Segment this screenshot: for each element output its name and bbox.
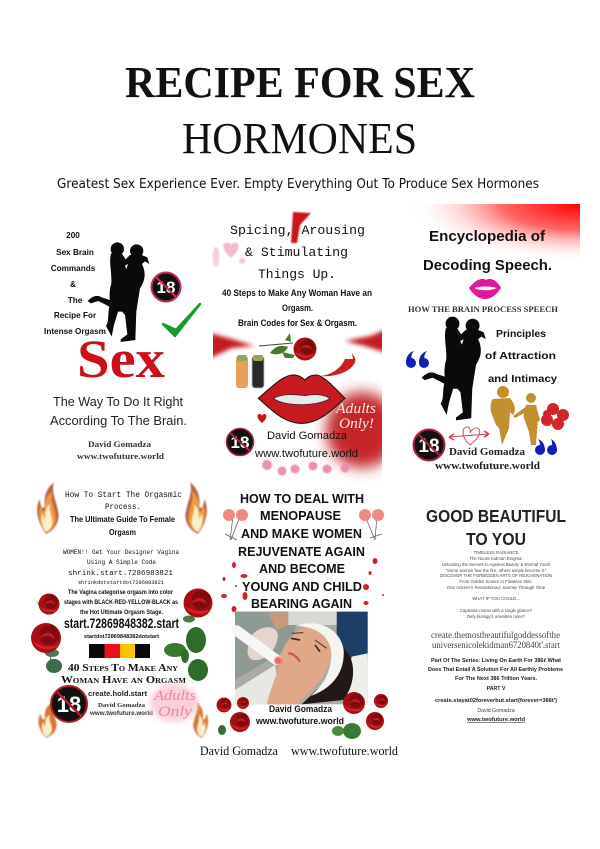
icon: pink lips xyxy=(469,279,501,299)
subheading: how the brain process speech: HOW THE BRAIN PROCESS SPEECH xyxy=(408,305,559,314)
decorative red smears xyxy=(206,328,398,468)
label: adults only: Adults xyxy=(153,688,196,704)
text: principles of attraction: and Intimacy xyxy=(488,373,557,385)
subtitle: the way to do it right xyxy=(50,394,187,428)
icon: pink flowers xyxy=(262,460,350,476)
footer credit xyxy=(200,744,399,758)
icon: 18 plus badge xyxy=(414,430,444,460)
photo: facial treatment xyxy=(235,612,368,704)
author credit xyxy=(88,689,153,717)
heading: how to deal with menopause: AND BECOME xyxy=(259,561,345,576)
author credit: David Gomadza xyxy=(267,430,348,442)
text: timeless radiance intro: The Nicole Kidman Enigma: xyxy=(469,556,523,561)
icon: 18 plus badge: 18 xyxy=(418,436,440,457)
text: colour stages: stages with BLACK-RED-YELLOW-BLACK as xyxy=(64,599,178,606)
subheading: ultimate guide xyxy=(70,514,175,537)
icon: roses right xyxy=(164,588,212,681)
heading: 200 sex brain commands: Intense Orgasm xyxy=(44,327,106,336)
icon: colour flag bar xyxy=(89,644,150,658)
heading: how to deal with menopause: HOW TO DEAL WITH xyxy=(240,491,364,506)
subheading: 40 steps: Brain Codes for Sex & Orgasm. xyxy=(238,318,357,329)
footer credit: www.twofuture.world xyxy=(291,744,399,758)
text: designer code: Using A Simple Code xyxy=(87,559,156,566)
icon: 18 plus badge xyxy=(152,272,180,302)
heading: Sex: Sex xyxy=(77,329,165,389)
heading: spicing arousing: Spicing, Arousing xyxy=(230,223,365,238)
heading: good beautiful to you: TO YOU xyxy=(466,529,526,549)
subheading: 40 steps: Orgasm. xyxy=(282,303,313,314)
text: colour stages: the Hot Ultimate Orgasm Stage. xyxy=(80,609,163,616)
icon: 18 plus badge: 18 xyxy=(157,278,175,297)
heading: good beautiful to you: GOOD BEAUTIFUL xyxy=(426,506,566,526)
heading: how to start: How To Start The Orgasmic xyxy=(65,491,182,500)
panel: book cover Encyclopedia xyxy=(406,204,580,472)
heading: how to deal with menopause: YOUNG AND CHILD xyxy=(242,579,362,594)
text: timeless radiance intro: TIMELESS RADIANCE xyxy=(474,550,518,555)
text: principles of attraction: Principles xyxy=(496,328,546,340)
heading: encyclopedia: Decoding Speech. xyxy=(423,258,552,274)
code: create the most beautiful goddess: universenicolekidman6720840t'.start xyxy=(432,641,560,651)
icon: gold couple xyxy=(491,386,540,445)
icon: roses strip xyxy=(216,692,388,739)
text: part of the series: Part Of The Series: Living On Earth For 386ℓ What xyxy=(431,658,561,664)
decorative red corner gradient xyxy=(408,204,580,262)
icon: 18 plus badge xyxy=(226,428,254,456)
label: adults only: Only! xyxy=(339,416,374,432)
panel: book cover Spicing xyxy=(206,212,398,476)
heading: encyclopedia xyxy=(423,229,552,274)
footer credit: David Gomadza xyxy=(200,744,278,758)
text: timeless radiance intro: One Actress's Revolutionary Journey Through Time xyxy=(447,585,546,590)
code: startdot: startdot72869848382dotstart xyxy=(84,634,159,640)
heading: 200 sex brain commands: Recipe For xyxy=(54,311,97,320)
icon: red flower xyxy=(541,403,569,430)
heading: 200 sex brain commands xyxy=(44,231,106,336)
decorative red petals xyxy=(221,558,384,612)
author credit: www.twofuture.world xyxy=(254,448,358,460)
author credit xyxy=(435,447,540,472)
author credit xyxy=(466,708,525,723)
text: designer code: shrinkdotstartdot7286983821 xyxy=(78,579,165,586)
heading: how to deal with menopause: MENOPAUSE xyxy=(260,508,341,523)
text: timeless radiance intro: DISCOVER THE FORBIDDEN ARTS OF REJUVENATION xyxy=(440,573,552,578)
text: designer code: shrink.start.7286983821 xyxy=(68,570,173,578)
author credit: create.hold.start xyxy=(88,689,148,698)
title: RECIPE FOR SEX xyxy=(125,58,475,107)
title: HORMONES xyxy=(182,114,417,163)
text: part of the series: For The Next 386 Trillion Years. xyxy=(455,676,538,682)
subtitle: the way to do it right: According To The Brain. xyxy=(50,413,187,428)
panel: book cover Sex xyxy=(44,231,200,461)
text: part of the series: Does That Entail A Solution For All Earthly Problems xyxy=(428,667,563,673)
heading: how to deal with menopause: AND MAKE WOMEN xyxy=(241,526,362,541)
icon: bouquet right xyxy=(359,509,384,540)
icon: small heart xyxy=(258,414,266,423)
heading: 200 sex brain commands: Sex Brain xyxy=(56,248,94,257)
panel: book cover Menopause xyxy=(216,491,388,739)
heading: 200 sex brain commands: The xyxy=(68,296,83,305)
heading: how to start: Process. xyxy=(105,503,141,512)
heading: spicing arousing: Things Up. xyxy=(258,267,336,282)
text: principles of attraction xyxy=(485,328,557,385)
author credit xyxy=(254,430,358,460)
label: adults only: Only xyxy=(158,704,192,720)
heading: how to deal with menopause xyxy=(238,491,365,611)
icon: 18 plus badge xyxy=(51,686,87,722)
author credit: www.twofuture.world xyxy=(77,451,164,461)
label: adults only xyxy=(335,401,376,432)
author credit: www.twofuture.world xyxy=(89,710,153,717)
text: colour stages xyxy=(64,589,178,616)
panel: book cover Orgasmic Process xyxy=(31,482,212,738)
code: start: start.72869848382.start xyxy=(64,616,179,631)
icon: blue quote mark close xyxy=(535,439,557,455)
text: timeless radiance intro xyxy=(440,550,552,619)
text: designer code: WOMEN!! Get Your Designer Vagina xyxy=(63,549,179,556)
author credit xyxy=(77,439,164,461)
icon: blue quote mark open xyxy=(406,351,429,368)
author credit: www.twofuture.world xyxy=(255,716,344,727)
subheading: ultimate guide: The Ultimate Guide To Female xyxy=(70,514,175,524)
icon: couple silhouette xyxy=(88,242,149,342)
author credit: David Gomadza xyxy=(477,708,515,714)
text: designer code xyxy=(63,549,179,586)
panel: book cover Good Beautiful xyxy=(426,506,566,723)
author credit: David Gomadza xyxy=(269,704,333,715)
icon: green check mark xyxy=(163,304,200,336)
author credit: www.twofuture.world xyxy=(435,461,540,472)
subheading: 40 steps: Woman Have an Orgasm xyxy=(61,675,186,686)
icon: heart with arrow xyxy=(449,427,489,445)
subheading: 40 steps: 40 Steps to Make Any Woman Have an xyxy=(222,288,372,299)
heading: spicing arousing: & Stimulating xyxy=(245,245,348,260)
text: part of the series xyxy=(428,658,563,704)
text: timeless radiance intro: "Some women fear the fire, others simply become it." xyxy=(446,568,547,573)
text: timeless radiance intro: Unlocking the Secrets to Ageless Beauty & Eternal Youth xyxy=(442,562,551,567)
author credit: www.twofuture.world xyxy=(466,717,525,723)
text: timeless radiance intro: WHAT IF YOU COULD... xyxy=(472,596,520,601)
icon: flames xyxy=(37,482,208,738)
author credit: David Gomadza xyxy=(88,439,152,449)
author credit: David Gomadza xyxy=(98,702,146,709)
label: adults only: Adults xyxy=(335,401,376,417)
text: principles of attraction: of Attraction xyxy=(485,350,556,362)
heading: good beautiful to you xyxy=(426,506,566,549)
heading: how to deal with menopause: BEARING AGAIN xyxy=(251,596,352,611)
heading: 200 sex brain commands: Commands xyxy=(51,264,96,273)
subheading: 40 steps xyxy=(222,288,372,329)
icon: bouquet left xyxy=(223,509,248,540)
heading: 200 sex brain commands: & xyxy=(70,280,76,289)
text: timeless radiance intro: Captivate rooms with a single glance? xyxy=(460,608,533,613)
icon: red lips xyxy=(258,375,345,423)
subtitle: Greatest Sex Experience Ever. Empty Everything Out To Produce Sex Hormones xyxy=(57,177,539,192)
icon: couple silhouette xyxy=(422,317,486,420)
icon: spice bottles xyxy=(236,355,264,388)
icon: roses left xyxy=(31,594,62,673)
subheading: 40 steps: 40 Steps To Make Any xyxy=(68,663,178,674)
text: part of the series: create.stayat02foreverbut.start(forever=386t') xyxy=(435,698,557,704)
text: colour stages: The Vagina categorise orgasm into color xyxy=(68,589,173,596)
label: adults only xyxy=(150,684,198,722)
heading: how to deal with menopause: REJUVENATE AGAIN xyxy=(238,544,365,559)
title xyxy=(125,58,475,163)
subheading: 40 steps xyxy=(61,663,186,686)
icon: chili pepper xyxy=(320,353,355,376)
decorative pink hearts xyxy=(212,242,245,267)
icon: 18 plus badge: 18 xyxy=(231,433,249,452)
icon: rose xyxy=(259,333,316,360)
code: create the most beautiful goddess: create.themostbeautifulgoddessofthe xyxy=(431,630,560,641)
decorative red smear top xyxy=(291,212,311,243)
text: timeless radiance intro: Defy biology's unwritten rules? xyxy=(467,614,526,619)
heading: how to start xyxy=(65,491,182,512)
icon: 18 plus badge: 18 xyxy=(57,692,81,717)
author credit: David Gomadza xyxy=(449,447,526,458)
subtitle: the way to do it right: The Way To Do It Right xyxy=(53,394,183,409)
code: create the most beautiful goddess xyxy=(431,630,560,651)
text: timeless radiance intro: From Golden Screen to Flawless Skin: xyxy=(459,579,533,584)
subheading: ultimate guide: Orgasm xyxy=(109,527,136,537)
author credit xyxy=(255,704,344,727)
text: part of the series: PART V xyxy=(487,686,506,692)
heading: 200 sex brain commands: 200 xyxy=(66,231,80,240)
heading: spicing arousing xyxy=(230,223,365,282)
heading: encyclopedia: Encyclopedia of xyxy=(429,229,545,245)
